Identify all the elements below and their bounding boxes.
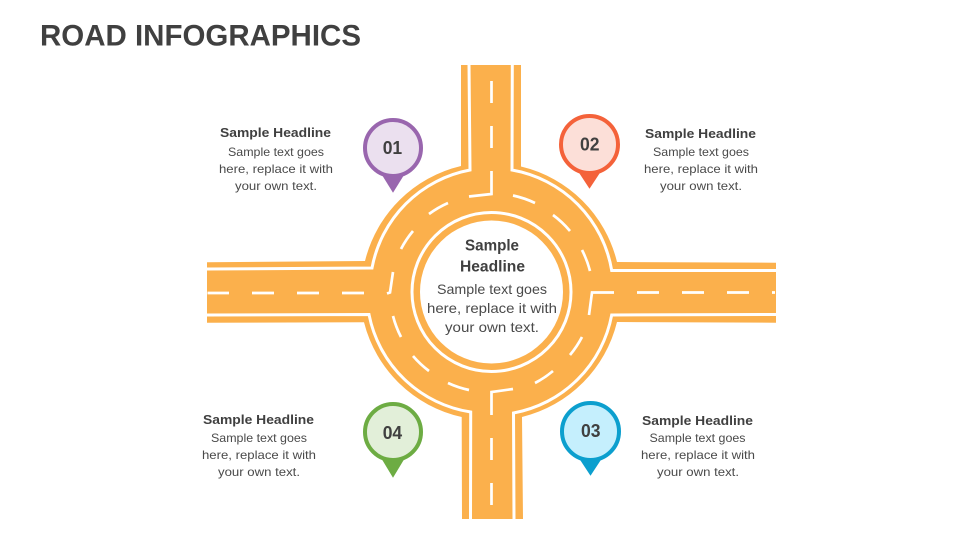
center text: Headline xyxy=(460,259,525,276)
text block 03: here, replace it with xyxy=(641,448,755,462)
roundabout road graphic xyxy=(207,64,776,519)
text block 01 xyxy=(219,125,333,193)
text block 01: here, replace it with xyxy=(219,162,333,176)
center text xyxy=(427,238,557,335)
lane dashes xyxy=(208,81,775,505)
text block 01: Sample Headline xyxy=(220,125,331,140)
road surface: roundabout with four arms xyxy=(207,65,776,519)
center text: Sample text goes xyxy=(437,281,547,297)
pin 01 xyxy=(365,120,421,193)
text block 04: here, replace it with xyxy=(202,448,316,462)
text block 02: your own text. xyxy=(660,179,742,193)
text block 03: Sample Headline xyxy=(642,413,753,428)
pin 02: 02 xyxy=(580,134,600,154)
text block 03: Sample text goes xyxy=(650,431,746,445)
text block 01: Sample text goes xyxy=(228,145,324,159)
text block 02: Sample text goes xyxy=(653,145,749,159)
text block 04: your own text. xyxy=(218,465,300,479)
text block 02: here, replace it with xyxy=(644,162,758,176)
pin 04: 04 xyxy=(383,423,402,443)
text block 04: Sample Headline xyxy=(203,412,314,427)
pin 01: 01 xyxy=(383,138,402,158)
text block 02 xyxy=(644,126,758,193)
text block 03 xyxy=(641,413,755,479)
pin 02 xyxy=(561,116,618,189)
center text: your own text. xyxy=(445,319,539,335)
inner ring line and central white circle xyxy=(412,212,571,372)
pin 04 xyxy=(365,404,421,478)
text block 02: Sample Headline xyxy=(645,126,756,141)
title: ROAD INFOGRAPHICS xyxy=(40,20,361,52)
text block 04: Sample text goes xyxy=(211,431,307,445)
pin 03 xyxy=(562,403,619,476)
text block 03: your own text. xyxy=(657,465,739,479)
text block 04 xyxy=(202,412,316,479)
center text: here, replace it with xyxy=(427,300,557,316)
pin 03: 03 xyxy=(581,421,600,441)
center text: Sample xyxy=(465,238,519,255)
text block 01: your own text. xyxy=(235,179,317,193)
road edge lines xyxy=(207,64,776,519)
